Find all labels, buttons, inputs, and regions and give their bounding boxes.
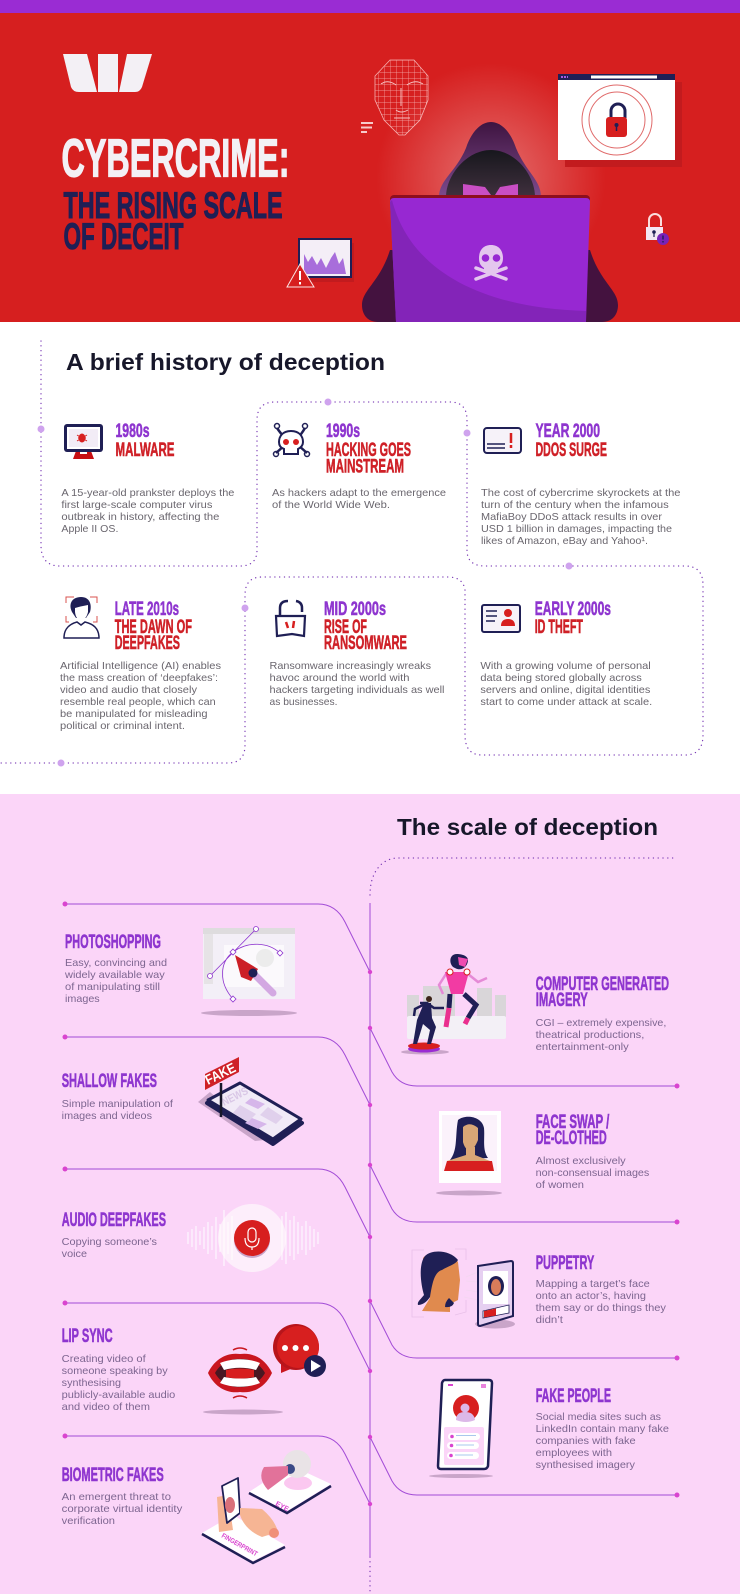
icon: ID card <box>482 605 520 632</box>
text block: Apple II OS. <box>61 523 118 535</box>
icon: infected monitor <box>64 424 103 459</box>
illustration: face mapped to phone <box>412 1249 515 1328</box>
text block: LinkedIn contain many fake <box>536 1423 669 1435</box>
title: THE RISING SCALE <box>64 185 282 226</box>
text block: outbreak in history, affecting the <box>61 511 220 523</box>
text block <box>536 1155 649 1191</box>
illustration: eye and fingerprint scans: EYE <box>274 1501 290 1513</box>
icon: skull and bones <box>274 424 310 456</box>
text block: start to come under attack at scale. <box>480 696 652 708</box>
illustration: fake news phone <box>198 1057 302 1144</box>
text block: USD 1 billion in damages, impacting the <box>481 523 672 535</box>
illustration: phone profile <box>429 1380 493 1478</box>
card: 1980s malware <box>61 421 235 535</box>
item: fake people: FAKE PEOPLE <box>536 1386 611 1407</box>
timeline connectors <box>62 858 680 1594</box>
icon: person in scan frame <box>64 597 99 638</box>
card: year 2000 DDoS: YEAR 2000 <box>536 421 600 442</box>
title: CYBERCRIME: <box>62 128 290 188</box>
item: biometric fakes <box>62 1450 331 1563</box>
text block: non-consensual images <box>536 1167 649 1179</box>
item: face swap: FACE SWAP / <box>536 1112 610 1133</box>
text block: Mapping a target’s face <box>536 1278 650 1290</box>
text block: someone speaking by <box>62 1365 168 1377</box>
top purple bar <box>0 0 740 13</box>
title: OF DECEIT <box>64 216 184 257</box>
text block: Social media sites such as <box>536 1411 661 1423</box>
text block: resemble real people, which can <box>60 696 216 708</box>
illustration: portrait photo <box>436 1111 502 1196</box>
text block: first large-scale computer virus <box>61 499 212 511</box>
icon: browser window with lock <box>558 74 682 167</box>
panel: header <box>0 0 740 322</box>
title <box>62 128 290 257</box>
card: late 2010s deepfakes: THE DAWN OF <box>115 617 192 638</box>
text block: video and audio that closely <box>60 684 198 696</box>
text block: images and videos <box>62 1110 152 1122</box>
text block: Simple manipulation of <box>62 1098 173 1110</box>
logo <box>63 54 152 92</box>
dotted timeline <box>0 341 703 766</box>
text block: be manipulated for misleading <box>60 708 208 720</box>
text block: An emergent threat to <box>62 1491 171 1503</box>
item: computer generated imagery <box>401 954 669 1054</box>
text block <box>481 487 681 547</box>
illustration: fake news phone: FAKE <box>202 1059 238 1088</box>
item: photoshopping: PHOTOSHOPPING <box>65 932 161 953</box>
card: 1980s malware: MALWARE <box>116 440 174 461</box>
text block: havoc around the world with <box>270 672 410 684</box>
text block <box>62 1491 183 1527</box>
text block: A 15-year-old prankster deploys the <box>61 487 235 499</box>
text block: the mass creation of ‘deepfakes’: <box>60 672 218 684</box>
heading: The scale of deception <box>397 814 658 840</box>
icon: warning triangle <box>287 264 314 287</box>
text block: political or criminal intent. <box>60 720 185 732</box>
text block: data being stored globally across <box>480 672 642 684</box>
illustration: eye and fingerprint scans: FINGERPRINT <box>220 1533 259 1558</box>
text block: The cost of cybercrime skyrockets at the <box>481 487 681 499</box>
text block: With a growing volume of personal <box>480 660 651 672</box>
card: late 2010s deepfakes: LATE 2010s <box>115 599 179 620</box>
item: fake people <box>429 1380 669 1478</box>
text block: didn’t <box>536 1314 563 1326</box>
text block: Creating video of <box>62 1353 146 1365</box>
card: 1980s malware: 1980s <box>116 421 150 442</box>
card: late 2010s deepfakes <box>60 597 221 732</box>
card: mid 2000s ransomware: MID 2000s <box>324 599 386 620</box>
item: lip sync <box>62 1324 326 1414</box>
text block: synthesised imagery <box>536 1459 636 1471</box>
illustration: fake news phone: NEWS <box>220 1085 250 1109</box>
icon: small open lock <box>646 214 669 245</box>
card: year 2000 DDoS: DDOS SURGE <box>536 440 607 461</box>
card: early 2000s ID theft: ID THEFT <box>535 617 583 638</box>
text block: them say or do things they <box>536 1302 667 1314</box>
text block: voice <box>62 1248 87 1260</box>
text block: widely available way <box>64 969 165 981</box>
card: 1990s hacking: 1990s <box>326 421 360 442</box>
illustration: eye and fingerprint scans <box>202 1450 331 1563</box>
text block <box>62 1353 175 1413</box>
panel: history <box>0 322 740 794</box>
text block: publicly-available audio <box>62 1389 175 1401</box>
icon: broken padlock <box>276 601 305 636</box>
text block: employees with <box>536 1447 612 1459</box>
item: shallow fakes: SHALLOW FAKES <box>62 1071 157 1092</box>
item: face swap <box>436 1111 649 1196</box>
text block <box>272 487 446 511</box>
text block <box>62 1236 157 1260</box>
card: late 2010s deepfakes: DEEPFAKES <box>115 633 180 654</box>
text block: CGI – extremely expensive, <box>536 1017 666 1029</box>
text block: likes of Amazon, eBay and Yahoo¹. <box>481 535 648 547</box>
text block: servers and online, digital identities <box>480 684 650 696</box>
item: computer generated imagery: IMAGERY <box>536 990 588 1011</box>
card: mid 2000s ransomware: RANSOMWARE <box>324 633 407 654</box>
text block: entertainment-only <box>536 1041 629 1053</box>
text block: synthesising <box>62 1377 121 1389</box>
illustration: microphone waveform <box>188 1204 318 1272</box>
text block: companies with fake <box>536 1435 636 1447</box>
text block: Almost exclusively <box>536 1155 626 1167</box>
illustration: lips and speech bubble <box>203 1324 326 1414</box>
item: photoshopping <box>64 926 297 1016</box>
text block: images <box>65 993 100 1005</box>
item: audio deepfakes: AUDIO DEEPFAKES <box>62 1210 166 1231</box>
item: shallow fakes <box>62 1057 302 1144</box>
illustration: robot and actor <box>401 954 506 1054</box>
text block: MafiaBoy DDoS attack results in over <box>481 511 663 523</box>
text block: Artificial Intelligence (AI) enables <box>60 660 221 672</box>
card: mid 2000s ransomware: RISE OF <box>324 617 367 638</box>
icon: chart <box>299 239 354 282</box>
icon: small menu lines <box>361 123 373 132</box>
text block <box>536 1411 669 1471</box>
text block: Easy, convincing and <box>65 957 167 969</box>
icon: alert window <box>484 428 521 453</box>
text block <box>480 660 652 708</box>
text block: theatrical productions, <box>536 1029 644 1041</box>
item: puppetry: PUPPETRY <box>536 1253 594 1274</box>
item: lip sync: LIP SYNC <box>62 1326 113 1347</box>
text block: onto an actor’s, having <box>536 1290 646 1302</box>
text block: As hackers adapt to the emergence <box>272 487 446 499</box>
text block: turn of the century when the infamous <box>481 499 669 511</box>
illustration: hooded hacker with laptop <box>362 63 618 322</box>
panel: scale of deception <box>0 794 740 1594</box>
icon: face mesh <box>375 60 428 135</box>
text block <box>62 1098 173 1122</box>
heading: A brief history of deception <box>66 349 385 375</box>
text block: of women <box>536 1179 584 1191</box>
text block <box>61 487 235 535</box>
text block: hackers targeting individuals as well <box>270 684 444 696</box>
text block <box>536 1017 666 1053</box>
text block: corporate virtual identity <box>62 1503 183 1515</box>
card: 1990s hacking: MAINSTREAM <box>326 456 404 478</box>
text block: and video of them <box>62 1401 150 1413</box>
card: year 2000 DDoS <box>481 421 681 547</box>
text block: verification <box>62 1515 115 1527</box>
card: mid 2000s ransomware <box>270 599 444 708</box>
item: audio deepfakes <box>62 1204 318 1272</box>
card: 1990s hacking: HACKING GOES <box>326 440 411 461</box>
text block: Copying someone’s <box>62 1236 157 1248</box>
illustration: pen tool <box>201 926 297 1016</box>
text block <box>64 957 167 1005</box>
text block: of the World Wide Web. <box>272 499 390 511</box>
text block <box>270 660 444 708</box>
text block: of manipulating still <box>65 981 160 993</box>
text block: as businesses. <box>270 696 338 708</box>
card: early 2000s ID theft <box>480 599 652 708</box>
card: early 2000s ID theft: EARLY 2000s <box>535 599 611 620</box>
item: puppetry <box>412 1249 667 1328</box>
text block <box>536 1278 667 1326</box>
text block: Ransomware increasingly wreaks <box>270 660 431 672</box>
item: biometric fakes: BIOMETRIC FAKES <box>62 1465 164 1486</box>
item: face swap: DE-CLOTHED <box>536 1128 607 1149</box>
text block <box>60 660 221 732</box>
card: 1990s hacking <box>272 421 446 511</box>
